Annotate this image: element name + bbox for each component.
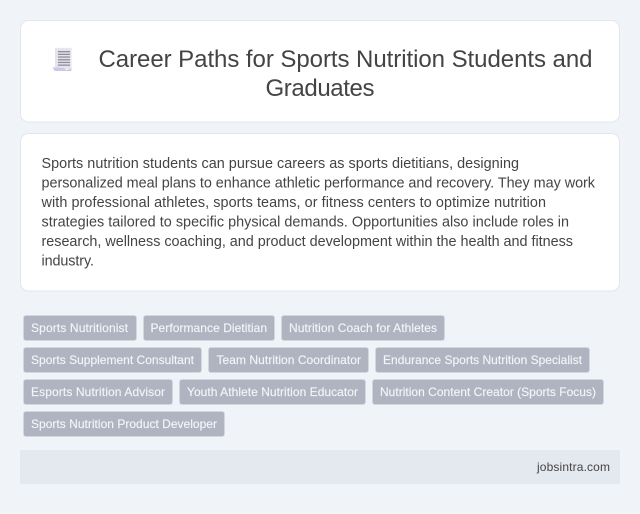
tag: Nutrition Coach for Athletes: Nutrition Coach for Athletes bbox=[289, 321, 437, 335]
title: Career Paths for Sports Nutrition Students and bbox=[98, 46, 592, 73]
tag: Sports Nutrition Product Developer bbox=[24, 412, 224, 436]
tag: Performance Dietitian: Performance Dietitian bbox=[150, 321, 267, 335]
text block: description bbox=[40, 156, 596, 270]
panel: description bbox=[20, 134, 620, 291]
tag: Sports Nutritionist: Sports Nutritionist bbox=[31, 321, 129, 335]
tag list bbox=[24, 316, 604, 436]
tag: Sports Nutrition Product Developer: Sports Nutrition Product Developer bbox=[31, 417, 217, 431]
tag: Nutrition Content Creator (Sports Focus) bbox=[372, 380, 604, 404]
tag: Sports Nutritionist bbox=[24, 316, 136, 340]
footer bar bbox=[20, 450, 620, 484]
tag: Endurance Sports Nutrition Specialist: Endurance Sports Nutrition Specialist bbox=[383, 353, 583, 367]
tag: Esports Nutrition Advisor bbox=[24, 380, 172, 404]
tag: Nutrition Coach for Athletes bbox=[282, 316, 444, 340]
tag: Youth Athlete Nutrition Educator bbox=[180, 380, 366, 404]
text block: description: with professional athletes, sports teams, or fitness centers to optimize nutrition bbox=[40, 195, 546, 211]
panel: title header bbox=[20, 20, 620, 122]
title bbox=[98, 46, 592, 102]
text block: description: strategies tailored to specific physical demands. Opportunities also include roles in bbox=[42, 214, 569, 230]
tag: Nutrition Content Creator (Sports Focus): Nutrition Content Creator (Sports Focus) bbox=[380, 385, 596, 399]
title: Graduates bbox=[266, 75, 374, 102]
tag: Endurance Sports Nutrition Specialist bbox=[376, 348, 590, 372]
footer source text: jobsintra.com bbox=[536, 460, 610, 474]
tag: Sports Supplement Consultant bbox=[24, 348, 202, 372]
tag: Esports Nutrition Advisor: Esports Nutrition Advisor bbox=[31, 385, 165, 399]
text block: description: research, wellness coaching, and product development within the health and fitness bbox=[42, 234, 573, 250]
text block: description: personalized meal plans to enhance athletic performance and recovery. They may work bbox=[42, 176, 596, 192]
tag: Team Nutrition Coordinator: Team Nutrition Coordinator bbox=[216, 353, 361, 367]
tag: Youth Athlete Nutrition Educator: Youth Athlete Nutrition Educator bbox=[187, 385, 358, 399]
tag: Performance Dietitian bbox=[144, 316, 274, 340]
tag: Sports Supplement Consultant: Sports Supplement Consultant bbox=[31, 353, 195, 367]
text block: description: industry. bbox=[42, 254, 94, 270]
icon: document receipt bbox=[53, 48, 72, 71]
text block: description: Sports nutrition students can pursue careers as sports dietitians, designing bbox=[42, 156, 519, 172]
tag: Team Nutrition Coordinator bbox=[208, 348, 368, 372]
